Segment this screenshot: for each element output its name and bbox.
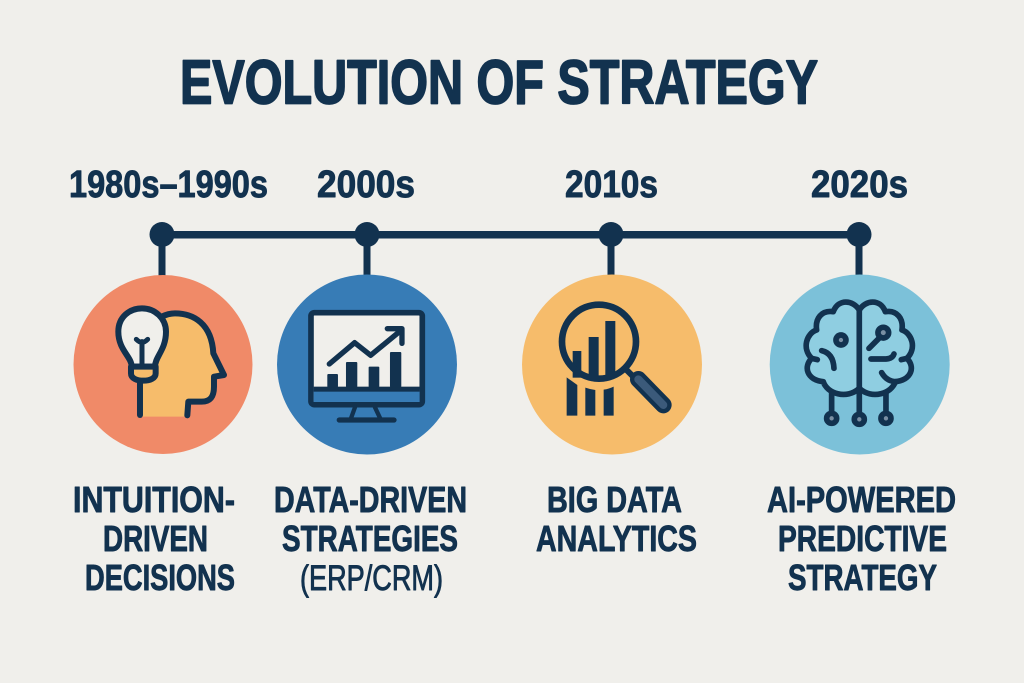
stage: 2020s	[767, 164, 956, 598]
description	[73, 479, 235, 598]
stage: 2010s	[522, 164, 702, 559]
description: AI-POWERED	[767, 479, 956, 520]
year label: 2010s	[565, 164, 658, 206]
description: INTUITION-	[73, 479, 235, 520]
year label: 1980s–1990s	[69, 164, 268, 206]
timeline	[150, 222, 872, 276]
description: STRATEGIES	[282, 518, 458, 559]
title: EVOLUTION OF STRATEGY	[180, 48, 818, 118]
circle	[522, 274, 702, 454]
icon: monitor with rising chart	[311, 313, 422, 420]
stage: 2000s	[274, 164, 467, 598]
description: ANALYTICS	[536, 518, 697, 559]
description: DECISIONS	[85, 557, 235, 598]
description: (ERP/CRM)	[300, 559, 443, 598]
icon: AI brain with circuit nodes	[806, 302, 912, 424]
description: PREDICTIVE	[778, 518, 947, 559]
icon: magnifying glass over bar chart	[562, 305, 663, 416]
icon: lightbulb and head	[118, 308, 224, 417]
year label: 2000s	[317, 164, 415, 206]
description	[274, 479, 467, 598]
description: DRIVEN	[103, 518, 208, 559]
year label: 2020s	[811, 164, 908, 206]
description: STRATEGY	[788, 557, 937, 598]
circle	[770, 274, 950, 454]
description	[767, 479, 956, 598]
stage: 1980s-1990s	[69, 164, 268, 598]
description: BIG DATA	[547, 479, 682, 520]
description: DATA-DRIVEN	[274, 479, 467, 520]
circle	[277, 274, 457, 454]
description	[536, 479, 697, 559]
circle	[74, 275, 252, 454]
